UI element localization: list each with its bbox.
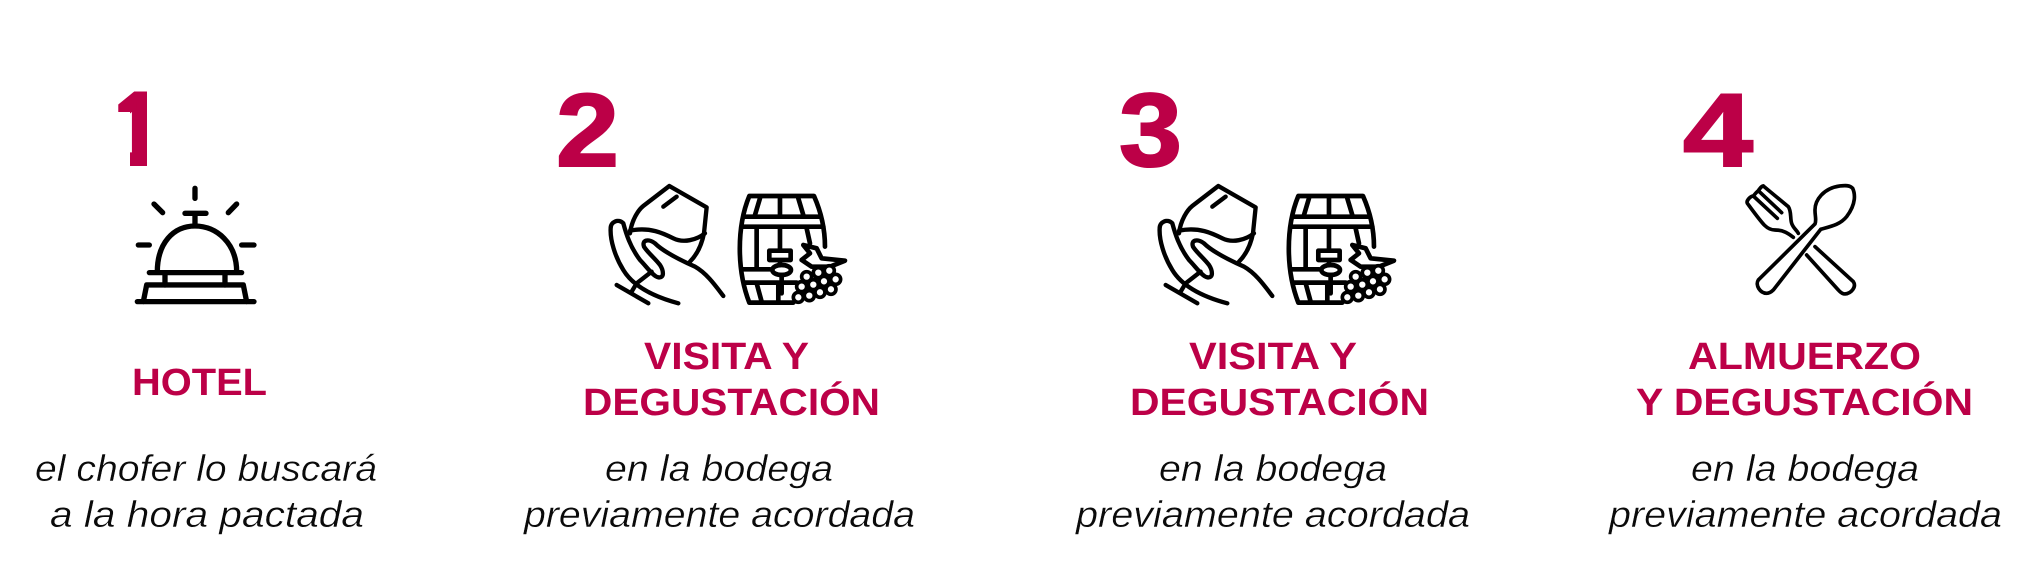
text: bodega description: en la bodega xyxy=(605,448,833,489)
text: bodega description: previamente acordada xyxy=(523,494,915,535)
heading: visita y degustacion xyxy=(583,336,880,424)
heading: visita y degustacion: VISITA Y xyxy=(644,336,809,378)
heading: hotel: HOTEL xyxy=(132,362,267,404)
icon: barrel with grapes xyxy=(1289,196,1394,303)
heading: almuerzo y degustacion: Y DEGUSTACIÓN xyxy=(1636,380,1973,424)
icon: crossed fork and spoon xyxy=(1747,186,1854,294)
heading: visita y degustacion: DEGUSTACIÓN xyxy=(1130,380,1429,424)
heading: almuerzo y degustacion xyxy=(1636,336,1973,424)
heading: visita y degustacion: VISITA Y xyxy=(1189,336,1357,378)
text: bodega description xyxy=(1608,448,2002,535)
icon: barrel with grapes xyxy=(740,196,845,303)
heading: visita y degustacion: DEGUSTACIÓN xyxy=(583,380,880,424)
heading: almuerzo y degustacion: ALMUERZO xyxy=(1688,336,1921,378)
icon: service bell xyxy=(137,188,254,302)
icon: wine glass in hand xyxy=(611,186,723,303)
text: bodega description: en la bodega xyxy=(1159,448,1387,489)
panel: step 4 lunch and tasting xyxy=(1608,73,2002,535)
panel: step 2 visit and tasting xyxy=(523,73,915,535)
panel: step 1 hotel xyxy=(35,73,377,535)
text: chofer description: a la hora pactada xyxy=(50,494,364,535)
number 1: 1 xyxy=(115,73,161,189)
text: bodega description xyxy=(1075,448,1470,535)
text: bodega description xyxy=(523,448,915,535)
text: bodega description: previamente acordada xyxy=(1075,494,1470,535)
text: chofer description: el chofer lo buscará xyxy=(35,448,377,489)
text: bodega description: previamente acordada xyxy=(1608,494,2002,535)
panel: step 3 visit and tasting xyxy=(1075,73,1470,535)
heading: visita y degustacion xyxy=(1130,336,1429,424)
number 4: 4 xyxy=(1683,73,1753,189)
text: bodega description: en la bodega xyxy=(1691,448,1919,489)
icon: wine glass in hand xyxy=(1160,186,1272,303)
text: chofer description xyxy=(35,448,377,535)
number 3: 3 xyxy=(1119,73,1182,189)
number 2: 2 xyxy=(556,73,619,189)
